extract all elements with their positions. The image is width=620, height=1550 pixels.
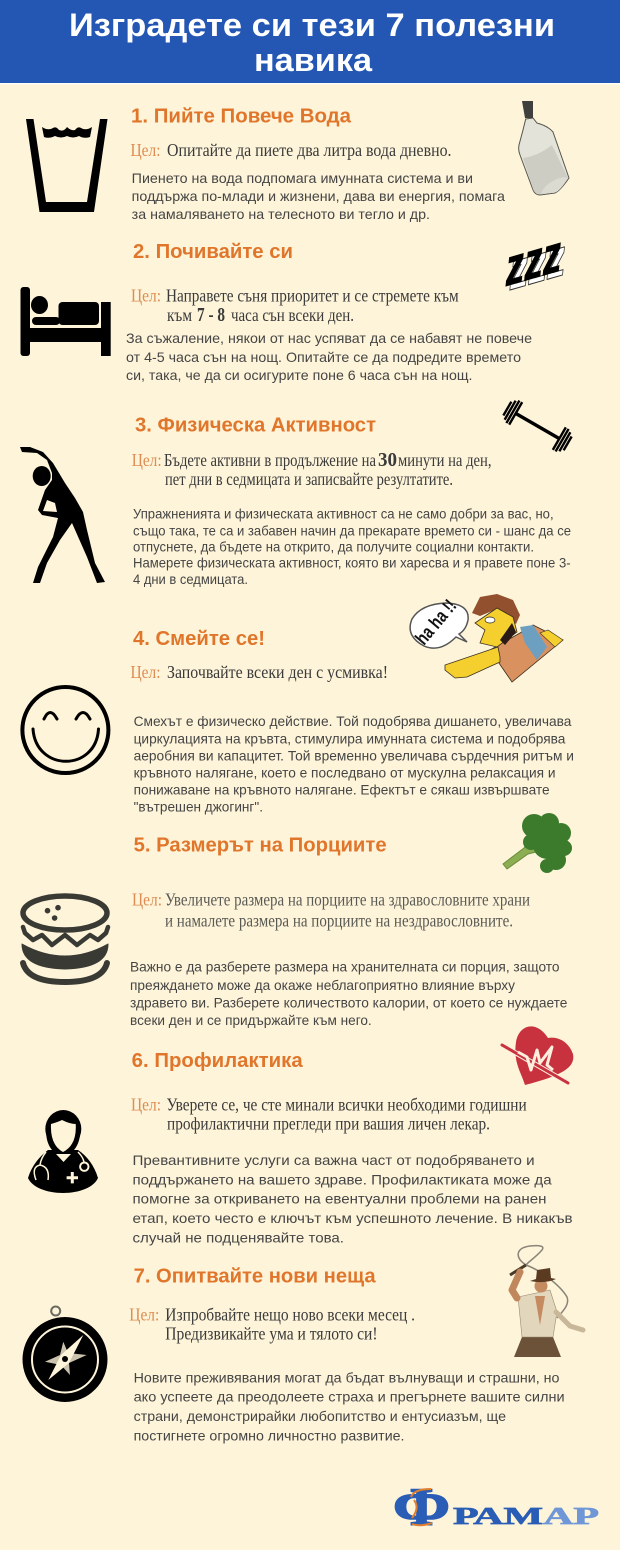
body text: За съжаление, някои от нас успяват да се набавят не повече bbox=[126, 330, 532, 346]
panel: habit 1 water bbox=[26, 101, 569, 222]
body text: Важно е да разберете размера на хранителната си порция, защото bbox=[130, 959, 560, 975]
heading: 4. Смейте се! bbox=[133, 628, 265, 650]
body text: си, така, че да си осигурите поне 6 часа сън на нощ. bbox=[126, 367, 472, 383]
body text: от 4-5 часа сън на нощ. Опитайте се да подредите времето bbox=[126, 349, 521, 365]
body text: Смехът е физическо действие. Той подобрява дишането, увеличава bbox=[134, 713, 572, 729]
icon: broccoli bbox=[503, 813, 572, 873]
body text: понижаване на кръвното налягане. Ефектът е сякаш извършвате bbox=[134, 781, 550, 797]
header banner with title bbox=[0, 0, 620, 84]
goal text: и намалете размера на порциите на нездравословните. bbox=[165, 911, 513, 931]
goal text: 30 bbox=[378, 449, 397, 471]
body text: етап, което често е ключът към успешното лечение. В никакъв bbox=[132, 1210, 573, 1226]
icon: glass of water bbox=[26, 119, 108, 212]
goal text: Цел: bbox=[132, 450, 162, 470]
goal text: Цел: bbox=[129, 1305, 159, 1325]
icon: sleeping zzz: zzz bbox=[508, 227, 567, 301]
icon: heart with pulse bbox=[502, 1026, 573, 1085]
body text: Пиенето на вода подпомага имунната система и ви bbox=[132, 170, 473, 186]
body text: 4 дни в седмицата. bbox=[133, 571, 248, 587]
heading: 3. Физическа Активност bbox=[135, 414, 376, 436]
goal text: пет дни в седмицата и записвайте резултатите. bbox=[165, 469, 453, 489]
logo: Фрамар bbox=[393, 1477, 599, 1537]
heading: 7. Опитвайте нови неща bbox=[134, 1266, 376, 1288]
body text bbox=[134, 713, 574, 815]
body text: за намаляването на телесното ви тегло и др. bbox=[132, 206, 430, 222]
goal text: Цел: bbox=[131, 1095, 161, 1115]
goal text: Започвайте всеки ден с усмивка! bbox=[167, 662, 388, 682]
logo: Фрамар: РАМ АР bbox=[453, 1504, 599, 1530]
goal text: минути на ден, bbox=[398, 450, 492, 470]
goal text bbox=[132, 449, 491, 489]
goal text: Направете съня приоритет и се стремете към bbox=[166, 286, 459, 306]
heading: 2. Почивайте си bbox=[133, 241, 293, 263]
body text bbox=[133, 505, 571, 587]
goal text bbox=[131, 1095, 527, 1133]
goal text bbox=[132, 890, 530, 931]
header banner with title: Изградете си тези 7 полезни bbox=[69, 7, 555, 43]
body text: кръвното налягане, което е последвано от мускулна релаксация и bbox=[134, 764, 556, 780]
body text: постигнете огромно личностно развитие. bbox=[134, 1427, 404, 1443]
goal text: Цел: bbox=[130, 140, 160, 160]
body text bbox=[132, 170, 505, 222]
logo: Фрамар: Ф bbox=[393, 1477, 450, 1537]
goal text: Изпробвайте нещо ново всеки месец . bbox=[165, 1305, 415, 1325]
header banner with title: навика bbox=[254, 42, 372, 78]
body text: Превантивните услуги са важна част от подобряването и bbox=[132, 1152, 535, 1168]
goal text: Уверете се, че сте минали всички необходими годишни bbox=[166, 1095, 527, 1115]
panel: habit 5 portions bbox=[22, 813, 572, 1028]
speech bubble: ha ha !! bbox=[412, 596, 461, 649]
icon: person in bed bbox=[20, 287, 111, 356]
heading: 6. Профилактика bbox=[132, 1050, 304, 1072]
body text: помогне за откриването на евентуални проблеми на ранен bbox=[132, 1191, 546, 1207]
body text: здравето ви. Разберете количеството калории, от което се нуждаете bbox=[130, 994, 568, 1010]
body text: преяждането може да окаже неблагоприятно влияние върху bbox=[130, 977, 515, 993]
icon: smiley face bbox=[22, 687, 108, 773]
body text: страни, демонстрирайки любопитство и ентусиазъм, ще bbox=[134, 1408, 506, 1424]
icon: stretching figure bbox=[20, 447, 105, 583]
goal text: Бъдете активни в продължение на bbox=[164, 450, 376, 470]
body text: Упражненията и физическата активност са не само добри за вас, но, bbox=[133, 505, 554, 521]
goal text: Предизвикайте ума и тялото си! bbox=[165, 1323, 378, 1343]
icon: compass bbox=[22, 1306, 108, 1402]
goal text: часа сън всеки ден. bbox=[231, 305, 354, 325]
body text bbox=[130, 959, 568, 1028]
heading: 1. Пийте Повече Вода bbox=[131, 106, 352, 128]
body text bbox=[134, 1369, 565, 1443]
goal text: Цел: bbox=[131, 286, 161, 306]
panel: habit 3 physical activity bbox=[20, 397, 575, 587]
body text: аеробния ви капацитет. Той временно увеличава сърдечния ритъм и bbox=[134, 747, 574, 763]
body text: всеки ден и се придържайте към него. bbox=[130, 1012, 372, 1028]
goal text: към bbox=[167, 305, 192, 325]
body text: поддържането на вашето здраве. Профилактиката може да bbox=[132, 1171, 552, 1187]
body text: ако успеете да преодолеете страха и прегърнете вашите силни bbox=[134, 1389, 565, 1405]
body text: отпуснете, да бъдете на открито, да получите социални контакти. bbox=[133, 539, 534, 555]
heading: 5. Размерът на Порциите bbox=[134, 834, 387, 856]
icon: adventurer with whip bbox=[510, 1246, 583, 1357]
body text: Намерете физическата активност, която ви харесва и я правете поне 3- bbox=[133, 555, 571, 571]
icon: sleeping zzz: zzz bbox=[504, 223, 563, 297]
panel: habit 7 try new things bbox=[22, 1246, 583, 1443]
goal text bbox=[131, 286, 459, 326]
goal text: Опитайте да пиете два литра вода дневно. bbox=[167, 140, 452, 160]
body text: поддържа по-млади и жизнени, дава ви енергия, помага bbox=[132, 188, 505, 204]
goal text: Цел: bbox=[130, 662, 160, 682]
goal text: профилактични прегледи при вашия личен лекар. bbox=[167, 1113, 490, 1133]
body text: "вътрешен джогинг". bbox=[134, 799, 263, 815]
body text: също така, те са и забавен начин да прекарате времето си - шанс да се bbox=[133, 522, 571, 538]
goal text: Увеличете размера на порциите на здравословните храни bbox=[165, 890, 530, 910]
icon: laughing cartoon with speech bubble bbox=[410, 594, 563, 682]
panel: habit 2 rest bbox=[20, 223, 567, 383]
goal text: 7 - 8 bbox=[197, 304, 225, 326]
icon: dumbbell bbox=[500, 397, 575, 455]
goal text bbox=[129, 1305, 415, 1343]
icon: doctor bbox=[28, 1110, 98, 1193]
icon: burger bbox=[22, 896, 108, 982]
body text: циркулацията на кръвта, стимулира имунната система и подобрява bbox=[134, 730, 566, 746]
panel: habit 6 prevention bbox=[28, 1026, 573, 1245]
goal text: Цел: bbox=[132, 890, 162, 910]
body text: Новите преживявания могат да бъдат вълнуващи и страшни, но bbox=[134, 1369, 560, 1385]
body text: случай не подценявайте това. bbox=[132, 1229, 344, 1245]
body text bbox=[132, 1152, 573, 1245]
icon: bottle bbox=[519, 101, 569, 195]
panel: habit 4 laugh bbox=[22, 594, 574, 815]
body text bbox=[126, 330, 532, 383]
